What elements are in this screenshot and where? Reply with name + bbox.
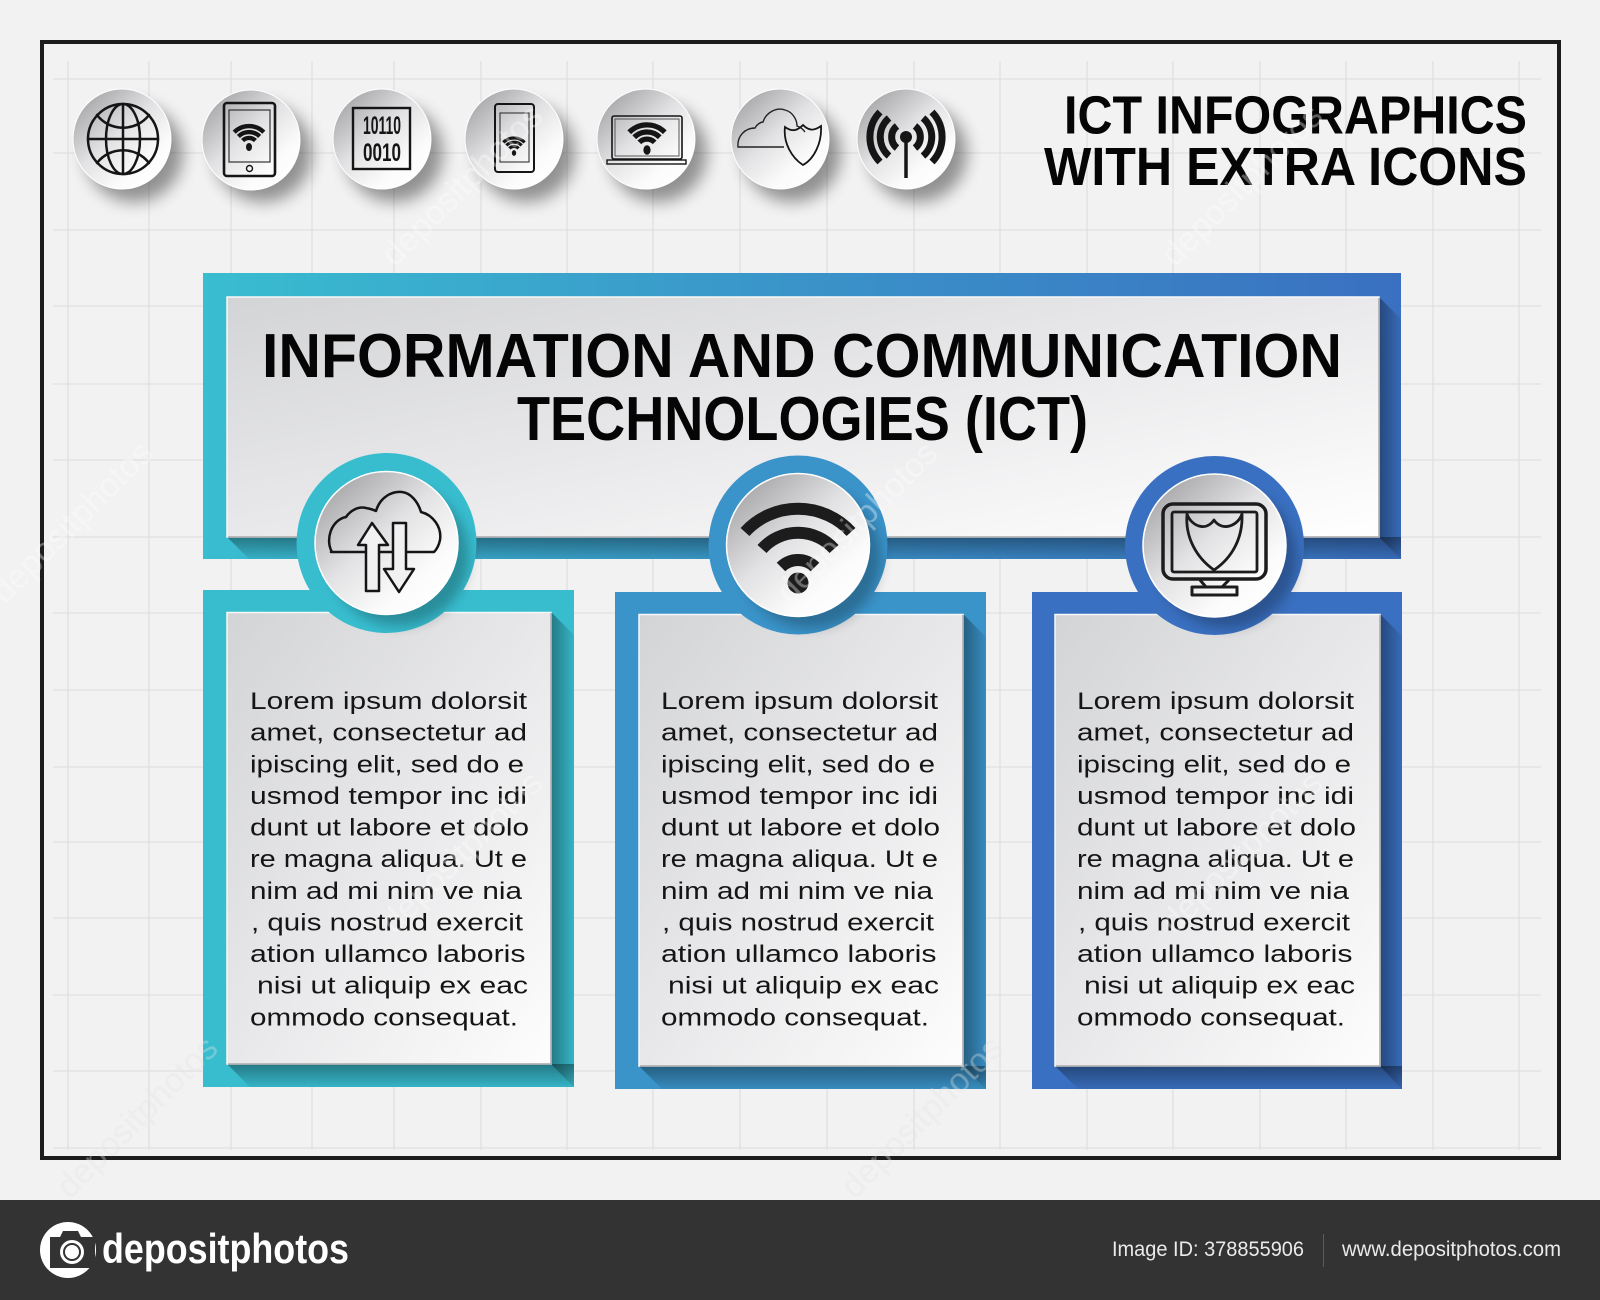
icon: tablet wifi badge: [202, 90, 312, 202]
panel: title banner: [203, 273, 1401, 559]
icon: binary code badge: 10110: [363, 112, 401, 140]
text: footer brand: depositphotos: [102, 1225, 349, 1272]
watermarks: [0, 97, 1330, 1206]
heading: ICT infographics: ICT INFOGRAPHICS: [1064, 86, 1527, 146]
panel: text card 1: [203, 590, 574, 1087]
text block: card 1 body: [250, 688, 529, 1031]
text block: card 2 body: nim ad mi nim ve nia: [661, 878, 934, 905]
watermarks: depositphotos: [374, 764, 550, 941]
heading: ICT infographics: [1044, 86, 1527, 197]
footer bar: [0, 1200, 1600, 1300]
icon: cloud and shield badge: [731, 89, 841, 202]
text block: card 3 body: dunt ut labore et dolo: [1077, 814, 1356, 842]
text block: card 1 body: nisi ut aliquip ex eac: [257, 973, 528, 1000]
text block: card 2 body: Lorem ipsum dolorsit: [661, 688, 938, 715]
text block: card 3 body: nisi ut aliquip ex eac: [1084, 973, 1355, 1000]
watermarks: depositphotos: [1154, 764, 1330, 941]
text block: card 1 body: Lorem ipsum dolorsit: [250, 688, 527, 715]
text block: card 1 body: ipiscing elit, sed do e: [250, 751, 524, 778]
text block: card 1 body: re magna aliqua. Ut e: [250, 846, 527, 873]
text block: card 3 body: ation ullamco laboris: [1077, 941, 1352, 968]
text block: card 3 body: Lorem ipsum dolorsit: [1077, 688, 1354, 715]
text: website: www.depositphotos.com: [1341, 1238, 1561, 1261]
text block: card 3 body: amet, consectetur ad: [1077, 720, 1354, 747]
watermarks: depositphotos: [1154, 97, 1330, 274]
text block: card 3 body: re magna aliqua. Ut e: [1077, 846, 1354, 873]
watermarks: depositphotos: [834, 1029, 1010, 1206]
panel: text card 2: [615, 592, 986, 1089]
icon: binary code badge: 0010: [363, 139, 401, 167]
icon: globe badge: [73, 89, 183, 202]
text block: card 3 body: usmod tempor inc idi: [1077, 783, 1354, 810]
icon: wifi badge: [708, 456, 888, 634]
text block: card 2 body: nisi ut aliquip ex eac: [668, 973, 939, 1000]
text block: card 3 body: , quis nostrud exercit: [1078, 909, 1350, 936]
icon: footer logo: [40, 1222, 96, 1278]
text block: card 1 body: ommodo consequat.: [250, 1004, 518, 1031]
text block: card 1 body: , quis nostrud exercit: [251, 909, 523, 936]
text block: card 1 body: amet, consectetur ad: [250, 720, 527, 747]
text block: card 3 body: nim ad mi nim ve nia: [1077, 878, 1350, 905]
icon: monitor shield badge: [1125, 456, 1304, 635]
text block: card 2 body: ipiscing elit, sed do e: [661, 751, 935, 778]
heading: ICT infographics: WITH EXTRA ICONS: [1044, 137, 1527, 197]
text block: card 1 body: ation ullamco laboris: [250, 941, 526, 968]
text block: card 2 body: amet, consectetur ad: [661, 720, 938, 747]
background grid: [53, 61, 1541, 1150]
text: image id: Image ID: 378855906: [1112, 1238, 1304, 1261]
title: information and communication technologies: TECHNOLOGIES (ICT): [517, 385, 1088, 454]
text block: card 2 body: re magna aliqua. Ut e: [661, 846, 938, 873]
text block: card 1 body: dunt ut labore et dolo: [250, 814, 529, 842]
text block: card 1 body: nim ad mi nim ve nia: [250, 878, 523, 905]
title: information and communication technologies: [262, 322, 1342, 454]
icon: laptop wifi badge: [597, 89, 707, 202]
text block: card 2 body: , quis nostrud exercit: [662, 909, 934, 936]
text block: card 2 body: dunt ut labore et dolo: [661, 814, 940, 842]
icon: cloud transfer badge: [296, 453, 476, 633]
text block: card 2 body: ommodo consequat.: [661, 1004, 929, 1031]
text block: card 2 body: usmod tempor inc idi: [661, 783, 938, 810]
text block: card 3 body: ipiscing elit, sed do e: [1077, 751, 1351, 778]
watermarks: depositphotos: [769, 434, 945, 611]
text block: card 3 body: [1077, 688, 1356, 1031]
text block: card 2 body: ation ullamco laboris: [661, 941, 936, 968]
icon: smartphone wifi badge: [465, 89, 575, 202]
text block: card 2 body: [661, 688, 940, 1031]
text block: card 1 body: usmod tempor inc idi: [250, 783, 527, 810]
title: information and communication technologies: INFORMATION AND COMMUNICATION: [262, 322, 1342, 391]
icon: antenna signal badge: [857, 89, 967, 202]
icon: binary code badge: [333, 89, 443, 202]
text block: card 3 body: ommodo consequat.: [1077, 1004, 1345, 1031]
panel: text card 3: [1032, 592, 1402, 1089]
watermarks: depositphotos: [49, 1029, 225, 1206]
watermarks: depositphotos: [374, 97, 550, 274]
